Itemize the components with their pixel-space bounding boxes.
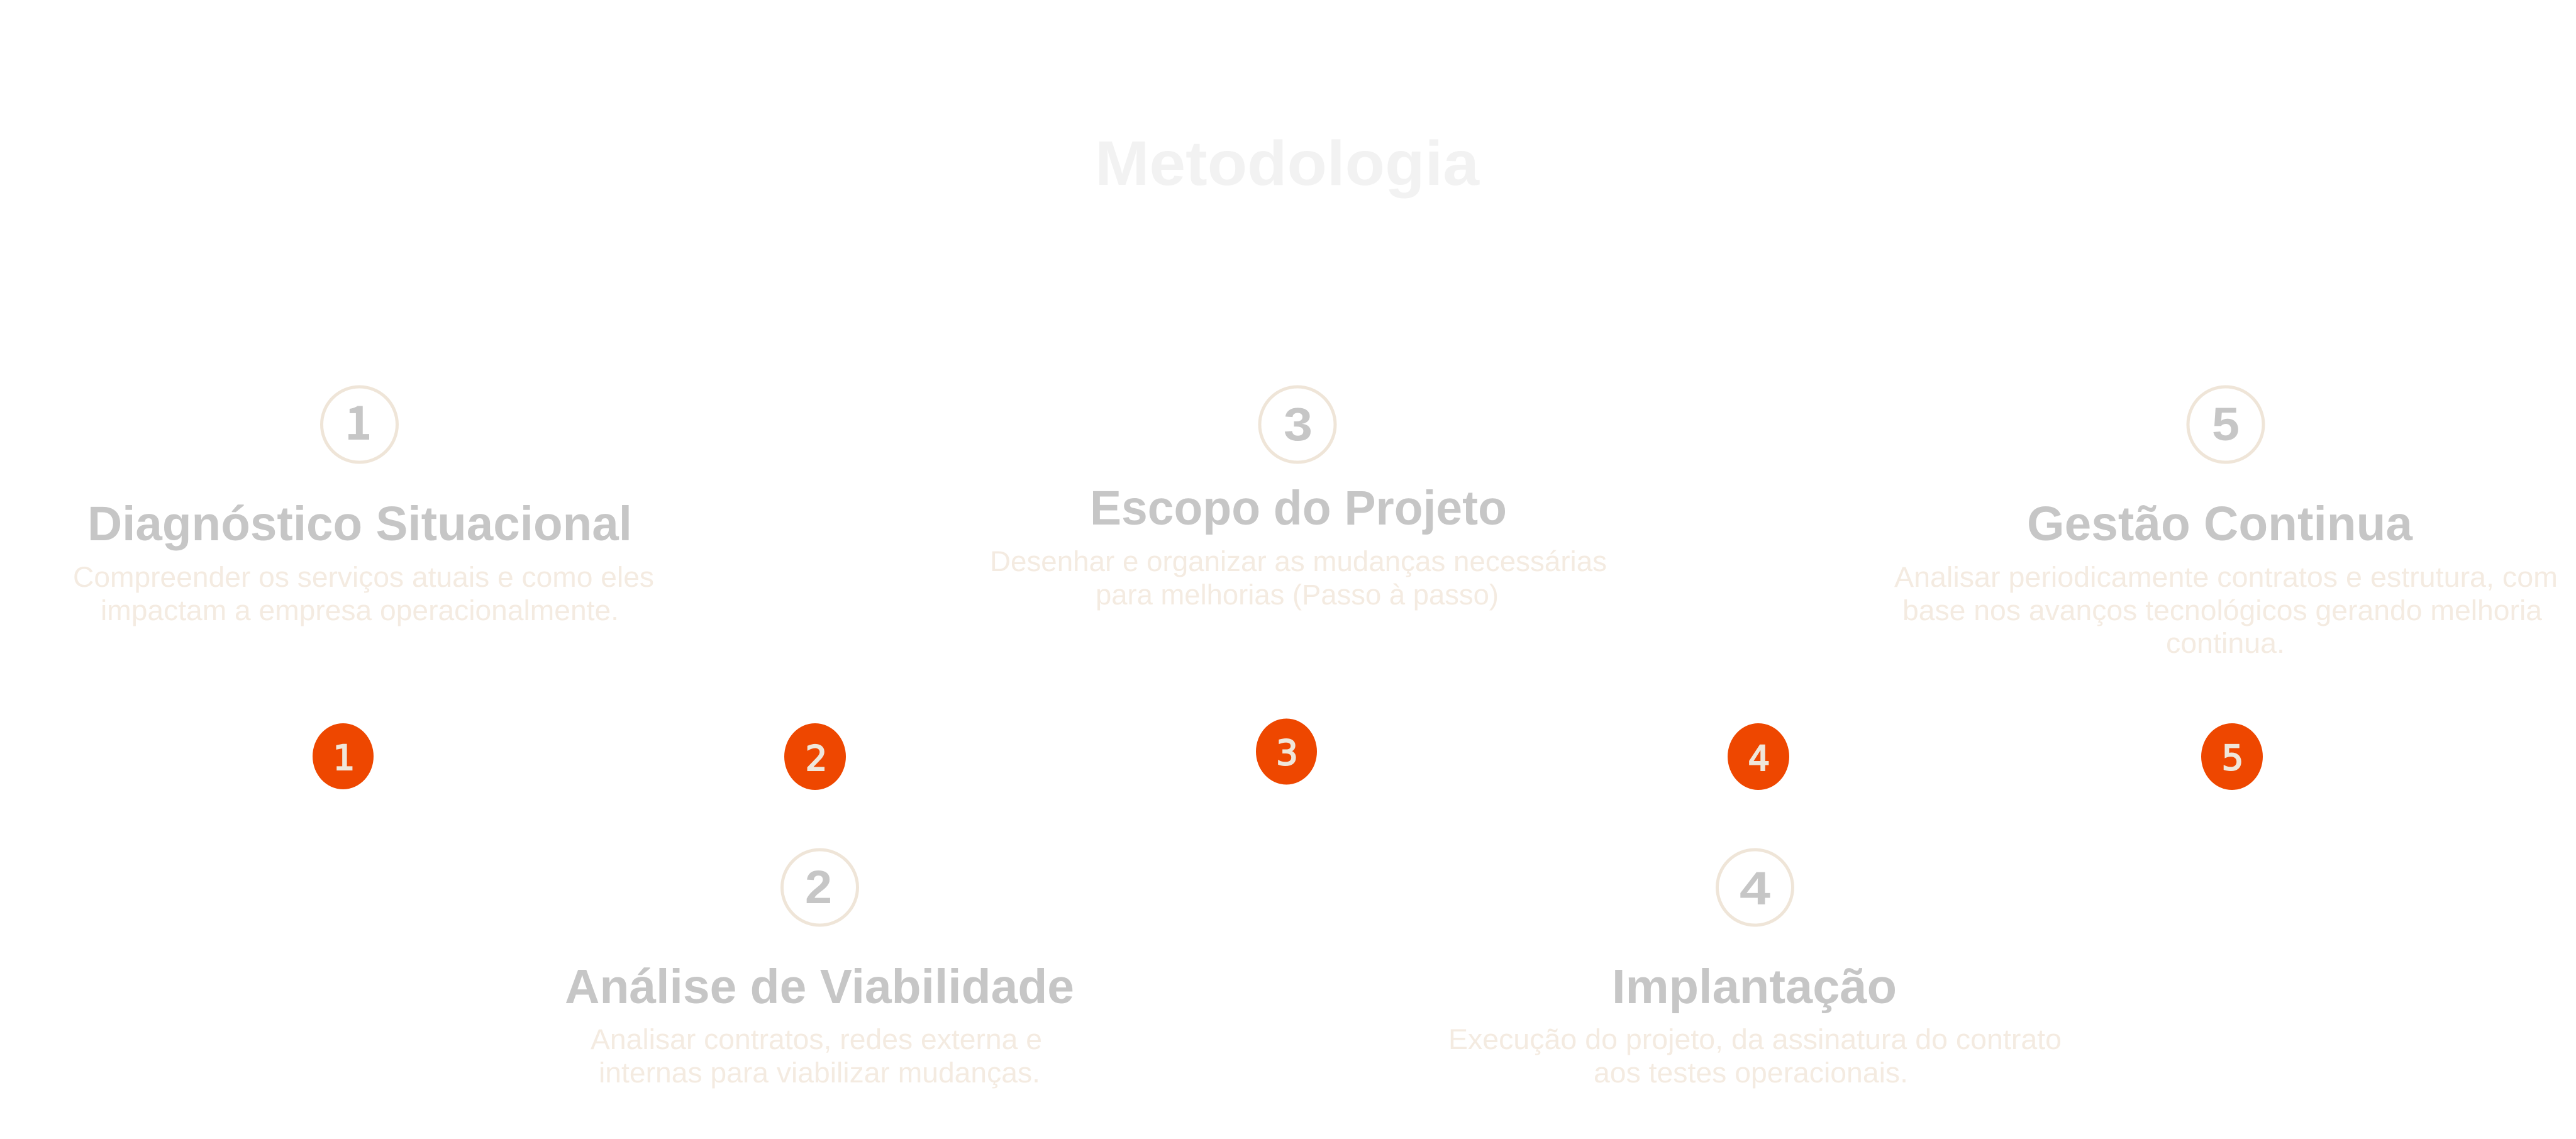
number circle 2: 2 [805,861,832,913]
number circle 2 [782,850,858,925]
badge 1 [313,723,374,789]
heading: Gestão Continua: Gestão Continua [2027,497,2413,551]
description: step 5: base nos avanços tecnológicos gerando melhoria [1902,594,2543,626]
badge 5: 5 [2221,738,2244,778]
number circle 5: 5 [2212,398,2240,450]
panel: step 4 [1448,850,2062,1089]
description: step 2: internas para viabilizar mudanças. [599,1057,1040,1089]
description: step 5 [1894,561,2558,659]
description: step 1: Compreender os serviços atuais e como eles [73,561,654,593]
title: Metodologia [1095,128,1480,199]
panel: step 3 [990,387,1607,611]
description: step 4: aos testes operacionais. [1594,1057,1908,1089]
description: step 1 [73,561,654,626]
panel: step 5 [1894,387,2558,659]
description: step 3: Desenhar e organizar as mudanças necessárias [990,545,1607,577]
badge 4 [1728,723,1789,790]
badge 1: 1 [333,738,355,778]
number circle 4: 4 [1740,862,1770,914]
description: step 2 [591,1023,1042,1089]
badge 3: 3 [1276,733,1298,773]
badge 4: 4 [1748,738,1770,779]
description: step 4: Execução do projeto, da assinatura do contrato [1448,1023,2062,1055]
number circle 1 [322,386,397,462]
number circle 3 [1260,387,1335,462]
badge 2 [784,723,846,790]
description: step 2: Analisar contratos, redes externa e [591,1023,1042,1055]
heading: Escopo do Projeto: Escopo do Projeto [1090,481,1507,535]
heading: Diagnóstico Situacional: Diagnóstico Situacional [87,497,632,551]
description: step 5: Analisar periodicamente contratos e estrutura, com [1894,561,2558,593]
description: step 3: para melhorias (Passo à passo) [1096,579,1499,611]
panel: step 1 [73,386,654,626]
description: step 5: continua. [2166,627,2285,659]
number circle 3: 3 [1284,398,1313,450]
heading: Implantação: Implantação [1612,960,1897,1014]
badge 5 [2201,723,2263,790]
description: step 4 [1448,1023,2062,1089]
number circle 4 [1717,850,1792,925]
description: step 3 [990,545,1607,611]
number circle 5 [2188,387,2263,462]
description: step 1: impactam a empresa operacionalmente. [101,594,619,626]
badge 3 [1256,718,1317,785]
badge 2: 2 [805,738,828,779]
heading: Análise de Viabilidade: Análise de Viabilidade [565,960,1074,1014]
panel: step 2 [565,850,1074,1089]
number circle 1: 1 [345,386,372,453]
